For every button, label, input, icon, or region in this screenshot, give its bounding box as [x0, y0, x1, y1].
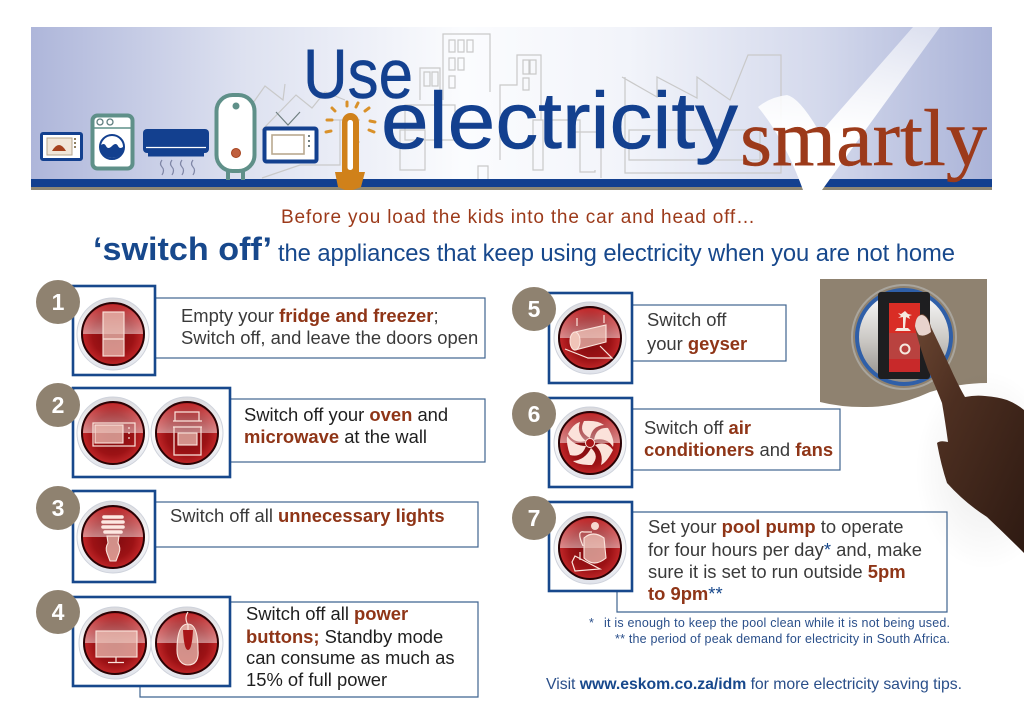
step 5: geyser — [512, 287, 786, 383]
step 7 text: pool pump to operate — [722, 516, 904, 537]
step 1 text: Empty your — [181, 305, 279, 326]
text box 6 — [625, 409, 840, 470]
icon frame 4 — [73, 597, 230, 686]
fingernail — [915, 315, 931, 336]
text box 7 — [617, 512, 947, 612]
step 7 text: to 9pm — [648, 583, 708, 604]
step 7 text: sure it is set to run outside — [648, 561, 868, 582]
step 5 text: your — [647, 333, 688, 354]
step 2 text: microwave — [244, 426, 339, 447]
icon: light bulb button — [77, 501, 149, 573]
website line: Visit www.eskom.co.za/idm for more electricity saving tips. — [546, 676, 962, 693]
round switch plate — [852, 285, 956, 389]
title: smartly: smartly — [740, 95, 987, 183]
hand shadow — [915, 370, 1024, 570]
number badge 5 — [512, 287, 556, 331]
number badge 7 — [512, 496, 556, 540]
text box 3 — [150, 502, 478, 547]
icon: geyser button — [554, 302, 626, 374]
footnotes: ** the period of peak demand for electricity in South Africa. — [615, 632, 950, 646]
step 4: power buttons — [36, 590, 478, 697]
step 4 text: buttons; — [246, 626, 325, 647]
headline: the appliances that keep using electricity when you are not home — [278, 240, 955, 267]
step 4 text: Switch off all — [246, 603, 354, 624]
number badge 6: 6 — [528, 401, 540, 427]
step 6: air conditioners and fans — [512, 392, 840, 487]
header banner — [31, 27, 992, 190]
number badge 5: 5 — [528, 296, 541, 322]
step 1 text: fridge and freezer; — [279, 305, 439, 326]
icon frame 6 — [549, 398, 632, 487]
number badge 3: 3 — [52, 495, 64, 521]
number badge 1: 1 — [52, 289, 65, 315]
step 4 text: can consume as much as — [246, 647, 455, 668]
icon frame 5 — [549, 293, 632, 383]
number badge 4 — [36, 590, 80, 634]
title: Use: Use — [303, 35, 413, 113]
step 5 text: geyser — [688, 333, 747, 354]
banner background — [31, 27, 992, 190]
step 3 text: Switch off all unnecessary lights — [170, 505, 445, 526]
number badge 2 — [36, 383, 80, 427]
panel: switch with hand — [820, 279, 1024, 570]
step 1: fridge and freezer — [36, 280, 485, 375]
step 4 text: 15% of full power — [246, 669, 387, 690]
footnotes — [589, 616, 950, 646]
blue baseline bar — [31, 179, 992, 187]
number badge 2: 2 — [52, 392, 64, 418]
intro line: Before you load the kids into the car and head off… — [281, 207, 755, 228]
icon: pool pump button — [554, 512, 626, 584]
icon: microwave button — [77, 397, 149, 469]
text box 2 — [225, 399, 485, 462]
icon: computer mouse button — [151, 607, 223, 679]
step 7 text: Set your — [648, 516, 722, 537]
footnotes: * — [589, 616, 594, 630]
icon frame 7 — [549, 502, 632, 591]
icon: oven button — [151, 397, 223, 469]
step 2 text: oven and — [369, 404, 448, 425]
step 6 text: air — [728, 417, 751, 438]
text box 1 — [150, 298, 485, 358]
icon frame 3 — [73, 491, 155, 582]
icon: palm tree — [895, 311, 912, 331]
step 7 text: for four hours per day — [648, 539, 825, 560]
icon: glowing bulb — [326, 102, 375, 190]
step 7 text: ** — [708, 583, 723, 604]
icon: small microwave — [42, 134, 82, 160]
step 2 text: Switch off your — [244, 404, 369, 425]
step 6 text: and fans — [759, 439, 833, 460]
icon: air conditioner — [143, 129, 209, 175]
icon frame 2 — [73, 388, 230, 477]
step 2: oven and microwave — [36, 383, 485, 477]
text box 4 — [140, 602, 478, 697]
number badge 7: 7 — [528, 505, 540, 531]
step 7 text: 5pm — [868, 561, 906, 582]
headline: ‘switch off’ — [93, 231, 272, 267]
icon: television button — [79, 607, 151, 679]
icon: television microwave — [264, 112, 316, 162]
icon: fridge button — [77, 298, 149, 370]
step 1 text: Switch off, and leave the doors open — [181, 327, 478, 348]
icon: washing machine — [92, 116, 132, 168]
number badge 4: 4 — [52, 599, 65, 625]
tan background panel — [820, 279, 987, 407]
step 7 text: * and, make — [824, 539, 922, 560]
step 3: lights — [36, 486, 478, 582]
footnotes: it is enough to keep the pool clean while it is not being used. — [604, 616, 950, 630]
icon frame 1 — [73, 286, 155, 375]
step 4 text: Standby mode — [325, 626, 443, 647]
background building outlines — [248, 34, 781, 180]
title: electricity: electricity — [381, 76, 738, 165]
white check mark — [758, 27, 940, 190]
icon: fan button — [554, 407, 626, 479]
number badge 3 — [36, 486, 80, 530]
step 4 text: power — [354, 603, 408, 624]
icon: geyser — [216, 95, 254, 180]
step 5 text: Switch off — [647, 309, 727, 330]
step 6 text: conditioners — [644, 439, 754, 460]
text box 5 — [625, 305, 786, 361]
step 7: pool pump — [512, 496, 947, 612]
black rocker switch — [878, 292, 930, 379]
icon: power circle — [900, 344, 910, 354]
step 2 text: at the wall — [339, 426, 427, 447]
step 6 text: Switch off — [644, 417, 728, 438]
headline — [93, 231, 955, 267]
pointing hand — [915, 314, 1024, 553]
number badge 6 — [512, 392, 556, 436]
number badge 1 — [36, 280, 80, 324]
